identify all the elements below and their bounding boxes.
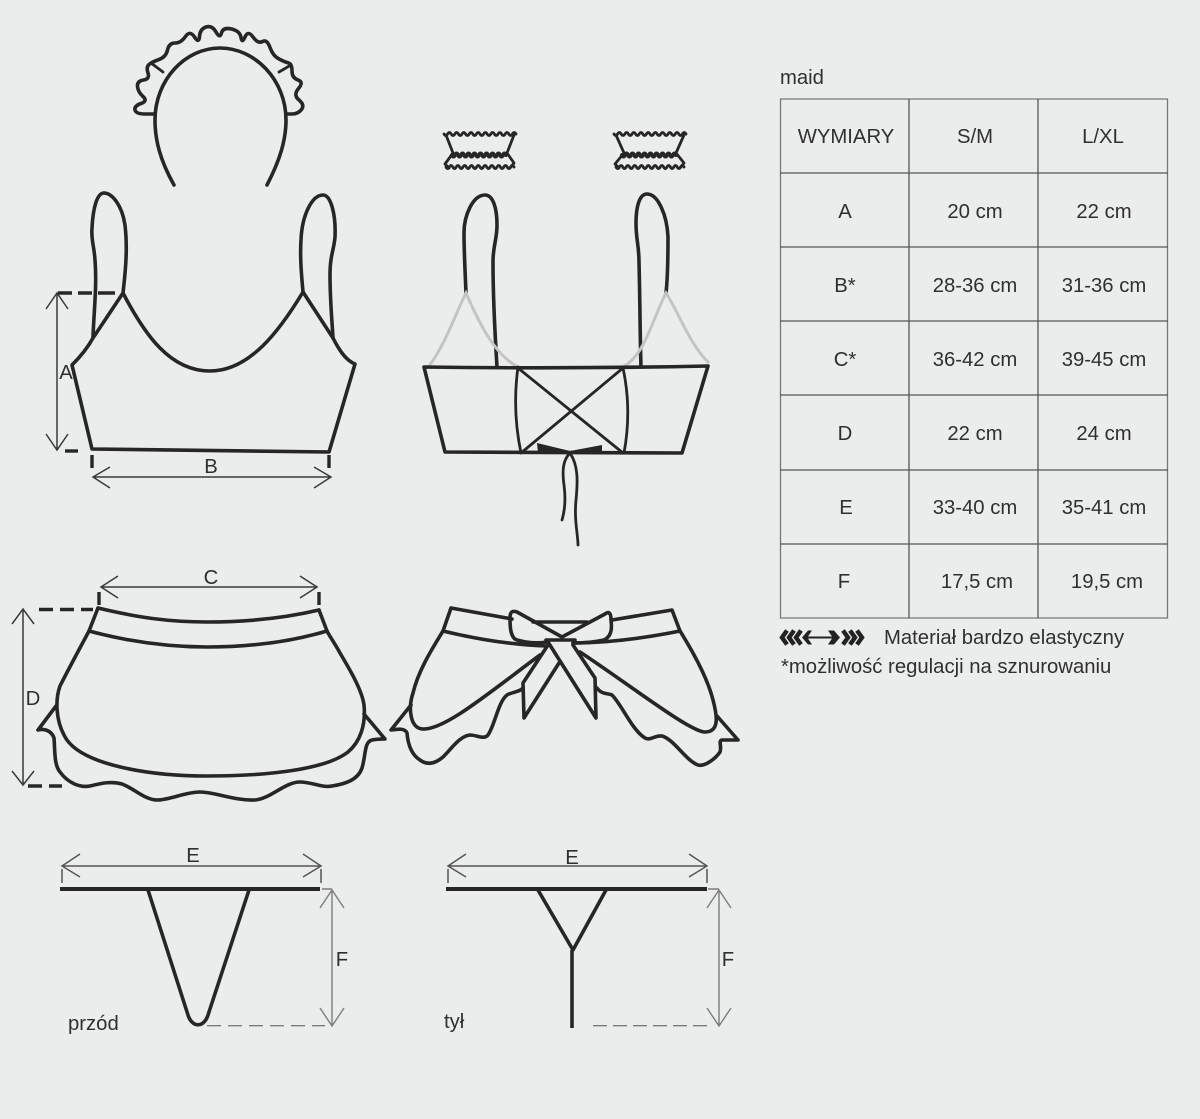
row F: 19,5 cm xyxy=(1071,571,1143,593)
dimension A xyxy=(46,293,115,451)
row B: 28-36 cm xyxy=(933,275,1017,297)
ties xyxy=(562,453,578,545)
row F: F xyxy=(838,571,850,593)
straps xyxy=(464,194,668,367)
icon: headband with ruffle xyxy=(135,27,303,185)
row F xyxy=(838,571,1143,593)
front cups seen through, grey xyxy=(429,293,709,367)
row E xyxy=(839,497,1146,519)
row C: C* xyxy=(834,349,856,371)
row C: 36-42 cm xyxy=(933,349,1017,371)
row F: 17,5 cm xyxy=(941,571,1013,593)
dimension E back: E xyxy=(565,847,579,869)
lacing xyxy=(516,367,628,453)
row A xyxy=(838,201,1132,223)
header row: WYMIARY xyxy=(798,126,895,148)
row A: A xyxy=(838,201,852,223)
dimension F back: F xyxy=(722,949,734,971)
dimension D: D xyxy=(26,688,40,710)
dimension D xyxy=(12,609,93,786)
row E: 33-40 cm xyxy=(933,497,1017,519)
header row xyxy=(798,126,1124,148)
size table xyxy=(780,99,1168,618)
dimension F front xyxy=(207,889,348,1026)
header row: L/XL xyxy=(1082,126,1124,148)
dimension F front: F xyxy=(336,949,348,971)
frill left xyxy=(391,688,523,763)
legend: elastic material: Materiał bardzo elastyczny xyxy=(884,627,1125,649)
dimension E front: E xyxy=(186,845,200,867)
row E: E xyxy=(839,497,853,519)
dimension B: B xyxy=(204,456,218,478)
apron skirt back with bow xyxy=(391,608,738,765)
label: front: przód xyxy=(68,1013,119,1035)
dimension C xyxy=(99,567,319,605)
row E: 35-41 cm xyxy=(1062,497,1146,519)
dimension E front xyxy=(62,845,321,883)
bow xyxy=(510,611,611,718)
dimension B xyxy=(92,455,331,488)
dimension E back xyxy=(448,847,707,883)
band xyxy=(424,366,708,453)
row D: 22 cm xyxy=(947,423,1003,445)
row A: 22 cm xyxy=(1076,201,1132,223)
bow xyxy=(537,443,602,453)
thong back with dimensions E and F xyxy=(444,847,734,1033)
row D: 24 cm xyxy=(1076,423,1132,445)
row D xyxy=(838,423,1132,445)
row D: D xyxy=(838,423,852,445)
icon: elastic material arrow xyxy=(782,630,862,644)
dimension F back xyxy=(593,889,734,1026)
label: back: tył xyxy=(444,1011,465,1033)
row B: B* xyxy=(834,275,856,297)
row C: 39-45 cm xyxy=(1062,349,1146,371)
thong front with dimensions E and F xyxy=(60,845,348,1035)
row B xyxy=(834,275,1146,297)
dimension A: A xyxy=(59,362,73,384)
icon: left wrist cuff xyxy=(444,132,516,168)
icon: right wrist cuff xyxy=(614,132,686,168)
header row: S/M xyxy=(957,126,993,148)
row B: 31-36 cm xyxy=(1062,275,1146,297)
bra front with dimensions A and B xyxy=(46,193,355,488)
row A: 20 cm xyxy=(947,201,1003,223)
apron skirt front with dimensions C and D xyxy=(12,567,385,800)
bra back with lacing xyxy=(424,194,709,545)
product name: maid xyxy=(780,67,824,89)
dimension C: C xyxy=(204,567,218,589)
footnote: lacing adjustment: *możliwość regulacji na sznurowaniu xyxy=(781,656,1111,678)
row C xyxy=(834,349,1146,371)
frill right xyxy=(597,688,738,765)
